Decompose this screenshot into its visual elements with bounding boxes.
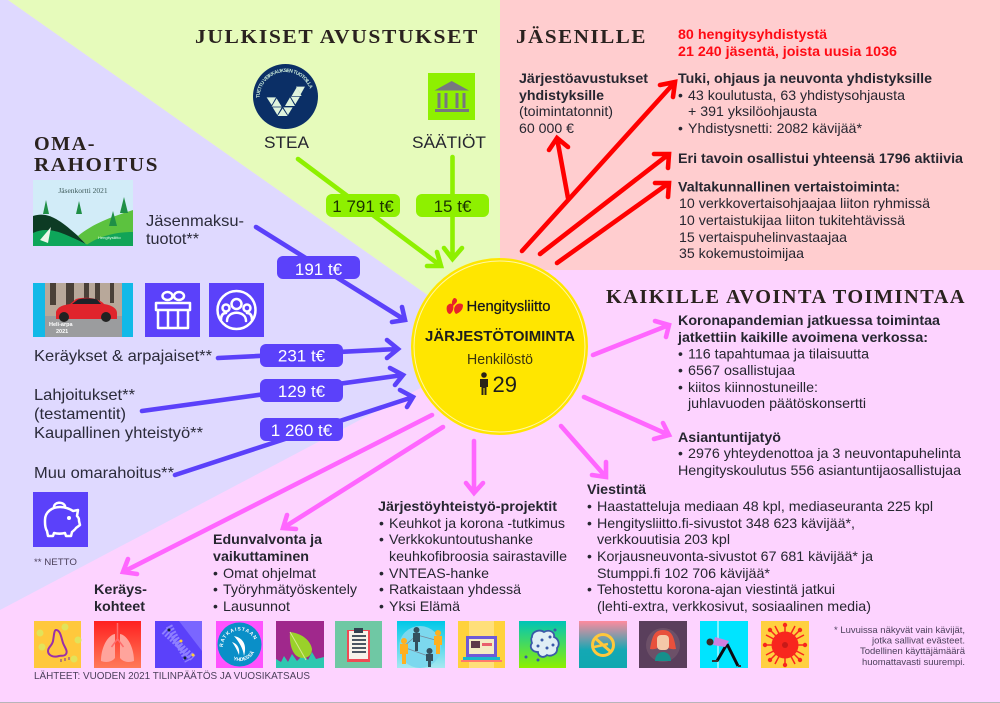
text: asiantuntijatyö: 2976 yhteydenottoa ja 3 neuvontapuhelinta — [688, 445, 961, 461]
note: netto: ** NETTO — [34, 557, 77, 568]
text: asiantuntijatyö: Asiantuntijatyö — [678, 429, 781, 445]
label: stea: STEA — [264, 133, 310, 152]
arrow: muu omarahoitus to center — [175, 390, 413, 475]
text: järjestöyhteistyö-projektit: Keuhkot ja korona -tutkimus — [389, 515, 565, 531]
amount: 1 791 t€: 1 791 t€ — [332, 197, 394, 216]
icon: lungs — [94, 621, 141, 668]
heading: kaikille avointa toimintaa: KAIKILLE AVOINTA TOIMINTAA — [606, 286, 966, 308]
text: järjestöavustukset: 60 000 € — [519, 120, 574, 136]
label: lahjoitukset — [34, 387, 135, 423]
label: lahjoitukset: (testamentit) — [34, 406, 126, 423]
heading: julkiset avustukset: JULKISET AVUSTUKSET — [195, 26, 479, 48]
text: viestintä: Stumppi.fi 102 706 kävijää* — [597, 565, 771, 581]
text: järjestöyhteistyö-projektit: Ratkaistaan yhdessä — [389, 581, 521, 597]
arrow: jäsenmaksut to center — [256, 227, 405, 322]
text: koronapandemia: • — [678, 346, 683, 362]
text: viestintä: verkkouutisia 203 kpl — [597, 531, 730, 547]
amount: 231 t€: 231 t€ — [278, 346, 326, 366]
text: asiantuntijatyö: • — [678, 445, 683, 461]
text: viestintä: Tehostettu korona-ajan viestintä jatkui — [597, 581, 835, 597]
text: vertaistoiminta: Valtakunnallinen vertaistoiminta: — [678, 178, 900, 194]
amount: 1 260 t€ — [260, 418, 343, 441]
text: järjestöyhteistyö-projektit — [378, 498, 567, 614]
footnote: kävijämäärä — [834, 625, 966, 668]
text: viestintä: Haastatteluja mediaan 48 kpl, mediaseuranta 225 kpl — [597, 498, 933, 514]
text: keräyskohteet: kohteet — [94, 598, 145, 614]
text: edunvalvonta ja vaikuttaminen: • — [213, 581, 218, 597]
icon: dna — [155, 621, 202, 668]
label: lahjoitukset: Lahjoitukset** — [34, 387, 135, 404]
label: jäsenmaksutuotot — [146, 213, 244, 248]
logo: hengitysliitto: Hengitysliitto — [466, 298, 550, 315]
text: koronapandemia: kiitos kiinnostuneille: — [688, 379, 818, 395]
label: säätiöt: SÄÄTIÖT — [412, 133, 486, 152]
text: koronapandemia — [677, 312, 940, 411]
text: viestintä: Korjausneuvonta-sivustot 67 681 kävijää* ja — [597, 548, 873, 564]
text: viestintä: • — [587, 581, 592, 597]
text: koronapandemia: • — [678, 362, 683, 378]
footnote: kävijämäärä: huomattavasti suurempi. — [862, 657, 965, 668]
text: edunvalvonta ja vaikuttaminen: vaikuttaminen — [213, 548, 309, 564]
icon: stea logo: TUETTU VEIKKAUKSEN TUOTOILLA — [256, 68, 312, 98]
text: järjestöavustukset: (toimintatonnit) — [519, 103, 613, 119]
text: tuki, ohjaus ja neuvonta: • — [678, 87, 683, 103]
amount: 191 t€: 191 t€ — [295, 260, 343, 279]
heading: oma-rahoitus: OMA- — [34, 133, 96, 155]
text: asiantuntijatyö: Hengityskoulutus 556 asiantuntijaosallistujaa — [678, 462, 961, 478]
text: vertaistoiminta: 35 kokemustoimijaa — [679, 245, 804, 261]
text: henkilöstö: Henkilöstö — [467, 351, 533, 368]
icon: network of people — [397, 621, 445, 668]
text: tuki, ohjaus ja neuvonta: Yhdistysnetti: 2082 kävijää* — [688, 120, 863, 136]
icon: gift — [145, 283, 200, 337]
icon: ratkaistaan yhdessä — [216, 621, 263, 668]
text: koronapandemia: • — [678, 379, 683, 395]
amount: 15 t€ — [416, 194, 489, 217]
text: järjestöyhteistyö-projektit: Yksi Elämä — [389, 598, 460, 614]
footnote: kävijämäärä: jotka sallivat evästeet. — [871, 636, 965, 646]
text: järjestöavustukset: yhdistyksille — [519, 87, 604, 103]
text: tuki, ohjaus ja neuvonta: + 391 yksilöohjausta — [688, 103, 817, 119]
icon: stea logo — [253, 64, 318, 129]
text: edunvalvonta ja vaikuttaminen: Lausunnot — [223, 598, 290, 614]
icon: coronavirus — [761, 621, 809, 668]
footnote: kävijämäärä: Todellinen käyttäjämäärä — [860, 646, 966, 657]
text: viestintä: Hengitysliitto.fi-sivustot 348 623 kävijää*, — [597, 515, 855, 531]
panel: oma-rahoitus background — [0, 0, 500, 610]
text: viestintä: Viestintä — [587, 481, 646, 497]
text: yhdistykset ja jäsenet — [678, 26, 897, 59]
text: järjestöyhteistyö-projektit: VNTEAS-hanke — [389, 565, 489, 581]
text: viestintä: (lehti-extra, verkkosivut, sosiaalinen media) — [597, 598, 871, 614]
text: yhdistykset ja jäsenet: 80 hengitysyhdistystä — [678, 26, 827, 42]
icon: piggy bank — [33, 492, 88, 547]
sources: LÄHTEET: VUODEN 2021 TILINPÄÄTÖS JA VUOSIKATSAUS — [34, 670, 310, 682]
arrow: keräykset to center — [218, 340, 398, 358]
text: koronapandemia: 116 tapahtumaa ja tilaisuutta — [688, 346, 869, 362]
text: asiantuntijatyö — [678, 429, 961, 478]
label: jäsenmaksutuotot: tuotot** — [146, 231, 199, 248]
arrow: stea to center — [298, 159, 441, 266]
text: järjestöavustukset — [519, 70, 648, 136]
amount: 15 t€: 15 t€ — [434, 197, 472, 216]
text: koronapandemia: jatkettiin kaikille avoimena verkossa: — [677, 329, 928, 345]
text: koronapandemia: 6567 osallistujaa — [688, 362, 795, 378]
text: tuki, ohjaus ja neuvonta: • — [678, 120, 683, 136]
arrow: lahjoitukset to center — [142, 368, 403, 411]
text: edunvalvonta ja vaikuttaminen: Omat ohjelmat — [223, 565, 316, 581]
arrows: pink to open activities — [123, 321, 669, 574]
icon: ratkaistaan yhdessä: YHDESSÄ — [234, 650, 254, 662]
amount: 191 t€ — [277, 256, 360, 279]
icon: yoga — [700, 621, 748, 668]
icon: laptop — [458, 621, 505, 668]
text: tuki, ohjaus ja neuvonta — [678, 70, 932, 136]
text: keräyskohteet — [94, 581, 147, 614]
text: järjestöyhteistyö-projektit: Järjestöyhteistyö-projektit — [378, 498, 557, 514]
panel: jäsenille background — [500, 0, 1000, 270]
text: yhdistykset ja jäsenet: 21 240 jäsentä, joista uusia 1036 — [678, 43, 897, 59]
amount: 1 260 t€: 1 260 t€ — [271, 421, 333, 440]
text: viestintä — [587, 481, 933, 614]
arrows: red to jäsenille — [522, 82, 675, 263]
icon: säätiöt bank building — [428, 73, 475, 120]
icon: clipboard — [335, 621, 382, 668]
panel: julkiset avustukset background — [8, 0, 500, 346]
text: edunvalvonta ja vaikuttaminen — [213, 531, 357, 614]
arrow: säätiöt to center — [444, 157, 462, 259]
text: järjestöyhteistyö-projektit: • — [379, 565, 384, 581]
image: jäsenkortti 2021: Hengitysliitto — [98, 235, 121, 240]
text: järjestöyhteistyö-projektit: • — [379, 515, 384, 531]
text: järjestöyhteistyö-projektit: Verkkokuntoutushanke — [389, 531, 533, 547]
icon: nose — [34, 621, 82, 668]
footnote: kävijämäärä: * Luvuissa näkyvät vain kävijät, — [834, 625, 965, 636]
icon: community — [209, 283, 264, 337]
center circle: järjestötoiminta — [411, 258, 588, 435]
text: tuki, ohjaus ja neuvonta: Tuki, ohjaus ja neuvonta yhdistyksille — [678, 70, 932, 86]
number: 29: 29 — [492, 372, 517, 397]
icon row: topics — [34, 621, 809, 668]
text: järjestöyhteistyö-projektit: keuhkofibroosia sairastaville — [389, 548, 567, 564]
heading: jäsenille: JÄSENILLE — [516, 25, 647, 48]
heading: oma-rahoitus — [34, 133, 159, 176]
text: keräyskohteet: Keräys- — [94, 581, 147, 597]
text: vertaistoiminta: 10 verkkovertaisohjaajaa liiton ryhmissä — [679, 195, 930, 211]
text: vertaistoiminta: 10 vertaistukijaa liiton tukitehtävissä — [679, 212, 905, 228]
text: vertaistoiminta: 15 vertaispuhelinvastaajaa — [679, 229, 847, 245]
amount: 1 791 t€ — [326, 194, 400, 217]
icon: birch leaf — [276, 621, 324, 668]
image: heli-arpa ticket: Heli-arpa — [49, 322, 73, 328]
amount: 129 t€ — [260, 379, 343, 402]
icon: mould spores — [519, 621, 566, 668]
icon: person — [480, 372, 488, 395]
text: edunvalvonta ja vaikuttaminen: • — [213, 565, 218, 581]
image: jäsenkortti 2021 — [33, 180, 133, 246]
text: edunvalvonta ja vaikuttaminen: Edunvalvonta ja — [213, 531, 322, 547]
amount: 129 t€: 129 t€ — [278, 382, 326, 401]
heading: oma-rahoitus: RAHOITUS — [34, 154, 159, 176]
image: jäsenkortti 2021: Jäsenkortti 2021 — [58, 186, 108, 195]
text: järjestöavustukset: Järjestöavustukset — [519, 70, 648, 86]
text: tuki, ohjaus ja neuvonta: 43 koulutusta, 63 yhdistysohjausta — [688, 87, 905, 103]
label: muu omarahoitus: Muu omarahoitus** — [34, 465, 174, 482]
image: heli-arpa ticket: 2021 — [56, 329, 68, 335]
heading: järjestötoiminta: JÄRJESTÖTOIMINTA — [425, 328, 575, 345]
text: viestintä: • — [587, 548, 592, 564]
text: järjestöyhteistyö-projektit: • — [379, 581, 384, 597]
label: keräykset & arpajaiset: Keräykset & arpajaiset** — [34, 348, 212, 365]
text: aktiivit: Eri tavoin osallistui yhteensä 1796 aktiivia — [678, 150, 963, 166]
text: koronapandemia: Koronapandemian jatkuessa toimintaa — [678, 312, 940, 328]
label: kaupallinen yhteistyö: Kaupallinen yhteistyö** — [34, 425, 203, 442]
label: jäsenmaksutuotot: Jäsenmaksu- — [146, 213, 244, 230]
text: järjestöyhteistyö-projektit: • — [379, 531, 384, 547]
image: heli-arpa ticket — [33, 283, 133, 337]
icon: woman — [639, 621, 687, 668]
text: edunvalvonta ja vaikuttaminen: • — [213, 598, 218, 614]
text: viestintä: • — [587, 515, 592, 531]
text: viestintä: • — [587, 498, 592, 514]
icon: ratkaistaan yhdessä: RATKAISTAAN — [220, 627, 258, 647]
text: koronapandemia: juhlavuoden päätöskonsertti — [687, 395, 866, 411]
text: järjestöyhteistyö-projektit: • — [379, 598, 384, 614]
text: vertaistoiminta — [678, 178, 930, 261]
icon: no smoking — [579, 621, 627, 668]
amount: 231 t€ — [260, 344, 343, 367]
text: edunvalvonta ja vaikuttaminen: Työryhmätyöskentely — [223, 581, 357, 597]
